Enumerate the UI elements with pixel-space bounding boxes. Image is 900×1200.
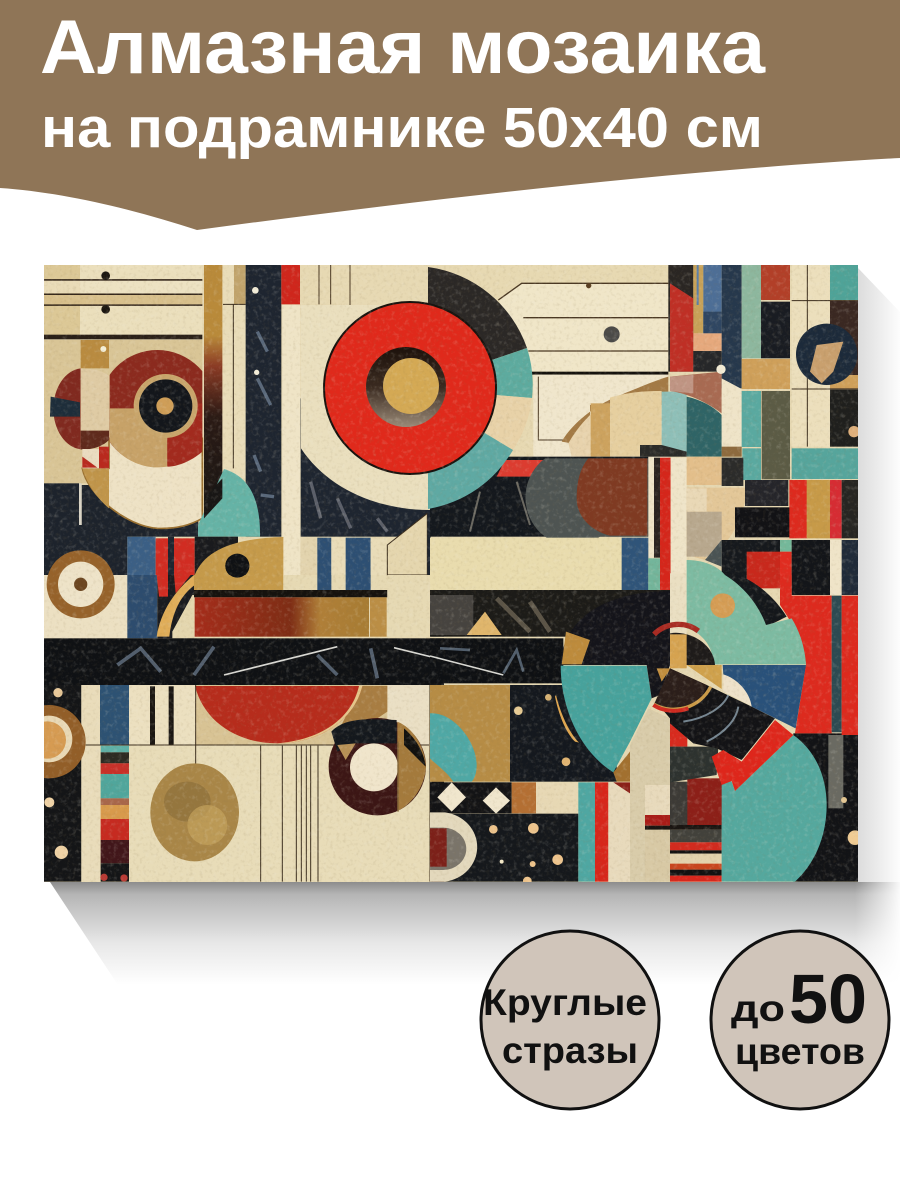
badge: up to 50 colours: цветов (735, 1031, 865, 1072)
badge: up to 50 colours: до (731, 988, 785, 1029)
badge: round rhinestones: Круглые (483, 982, 647, 1023)
painting marble specks (44, 265, 858, 882)
header banner (0, 0, 900, 230)
painting: lower right (430, 560, 862, 885)
badge: round rhinestones: стразы (502, 1030, 638, 1071)
badge: up to 50 colours: 50 (789, 960, 867, 1038)
painting: upper right (430, 265, 860, 575)
badge: round rhinestones (481, 931, 659, 1109)
painting: lower left (12, 550, 444, 882)
canvas shadow (50, 268, 900, 985)
subtitle: на подрамнике 50х40 см (41, 96, 763, 160)
painting texture (44, 265, 858, 882)
painting: upper left (44, 265, 431, 578)
painting: large red disc with ring (323, 267, 533, 509)
title: Алмазная мозаика (40, 5, 766, 90)
badge: up to 50 colours (711, 931, 889, 1109)
painting (12, 265, 862, 885)
